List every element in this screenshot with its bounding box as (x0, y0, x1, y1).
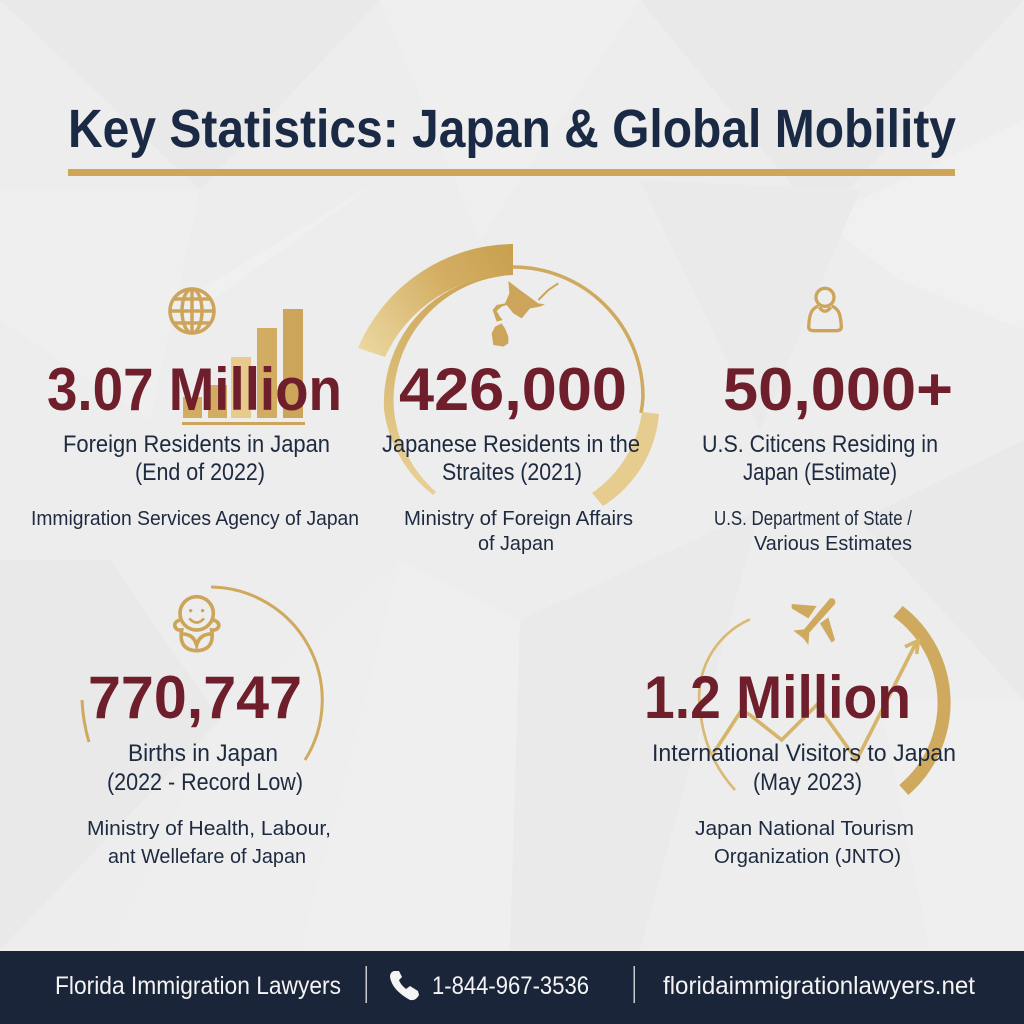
source: Immigration Services Agency of Japan (31, 507, 359, 530)
source: ant Wellefare of Japan (108, 845, 306, 868)
stat number: 770,747 (88, 664, 302, 731)
label: (End of 2022) (135, 459, 265, 486)
label: (2022 - Record Low) (107, 769, 303, 796)
source (87, 817, 331, 868)
label: (May 2023) (753, 769, 862, 796)
icon: person (809, 288, 841, 331)
icon: globe (170, 289, 214, 333)
label: Japan (Estimate) (743, 459, 897, 486)
label (382, 431, 640, 486)
icon: phone (390, 971, 419, 1000)
website: floridaimmigrationlawyers.net (663, 972, 975, 1000)
source: of Japan (478, 532, 554, 555)
stat number: 3.07 Million (47, 356, 342, 423)
stat number: 50,000+ (723, 356, 953, 423)
label (107, 740, 303, 796)
panel: Japanese residents in the States (358, 244, 659, 555)
source: Various Estimates (754, 532, 912, 555)
label: International Visitors to Japan (652, 740, 956, 767)
label: Births in Japan (128, 740, 278, 767)
panel: foreign residents (31, 289, 359, 530)
source (404, 507, 633, 555)
source: Ministry of Foreign Affairs (404, 507, 633, 530)
panel: U.S. citizens (702, 288, 953, 555)
phone number: 1-844-967-3536 (432, 972, 589, 1000)
icon: airplane (792, 598, 835, 645)
source: U.S. Department of State / (714, 507, 912, 530)
label (63, 431, 330, 486)
icon: Japan map (492, 281, 558, 347)
source: Japan National Tourism (695, 817, 914, 840)
panel: international visitors (644, 598, 956, 868)
source (695, 817, 914, 868)
label: Japanese Residents in the (382, 431, 640, 458)
label: U.S. Citicens Residing in (702, 431, 938, 458)
label: Foreign Residents in Japan (63, 431, 330, 458)
ring and trend graphic (699, 606, 951, 795)
label (652, 740, 956, 796)
icon: baby (175, 597, 219, 651)
stat number: 426,000 (399, 356, 627, 423)
label: Straites (2021) (442, 459, 582, 486)
source: Ministry of Health, Labour, (87, 817, 331, 840)
firm name: Florida Immigration Lawyers (55, 972, 341, 1000)
panel: births (82, 587, 331, 868)
source (714, 507, 912, 555)
ring graphic (358, 244, 659, 506)
stat number: 1.2 Million (644, 664, 911, 731)
source: Organization (JNTO) (714, 845, 901, 868)
label (702, 431, 938, 486)
bar chart (182, 309, 305, 425)
footer bar (0, 951, 1024, 1024)
ring graphic (82, 587, 322, 760)
